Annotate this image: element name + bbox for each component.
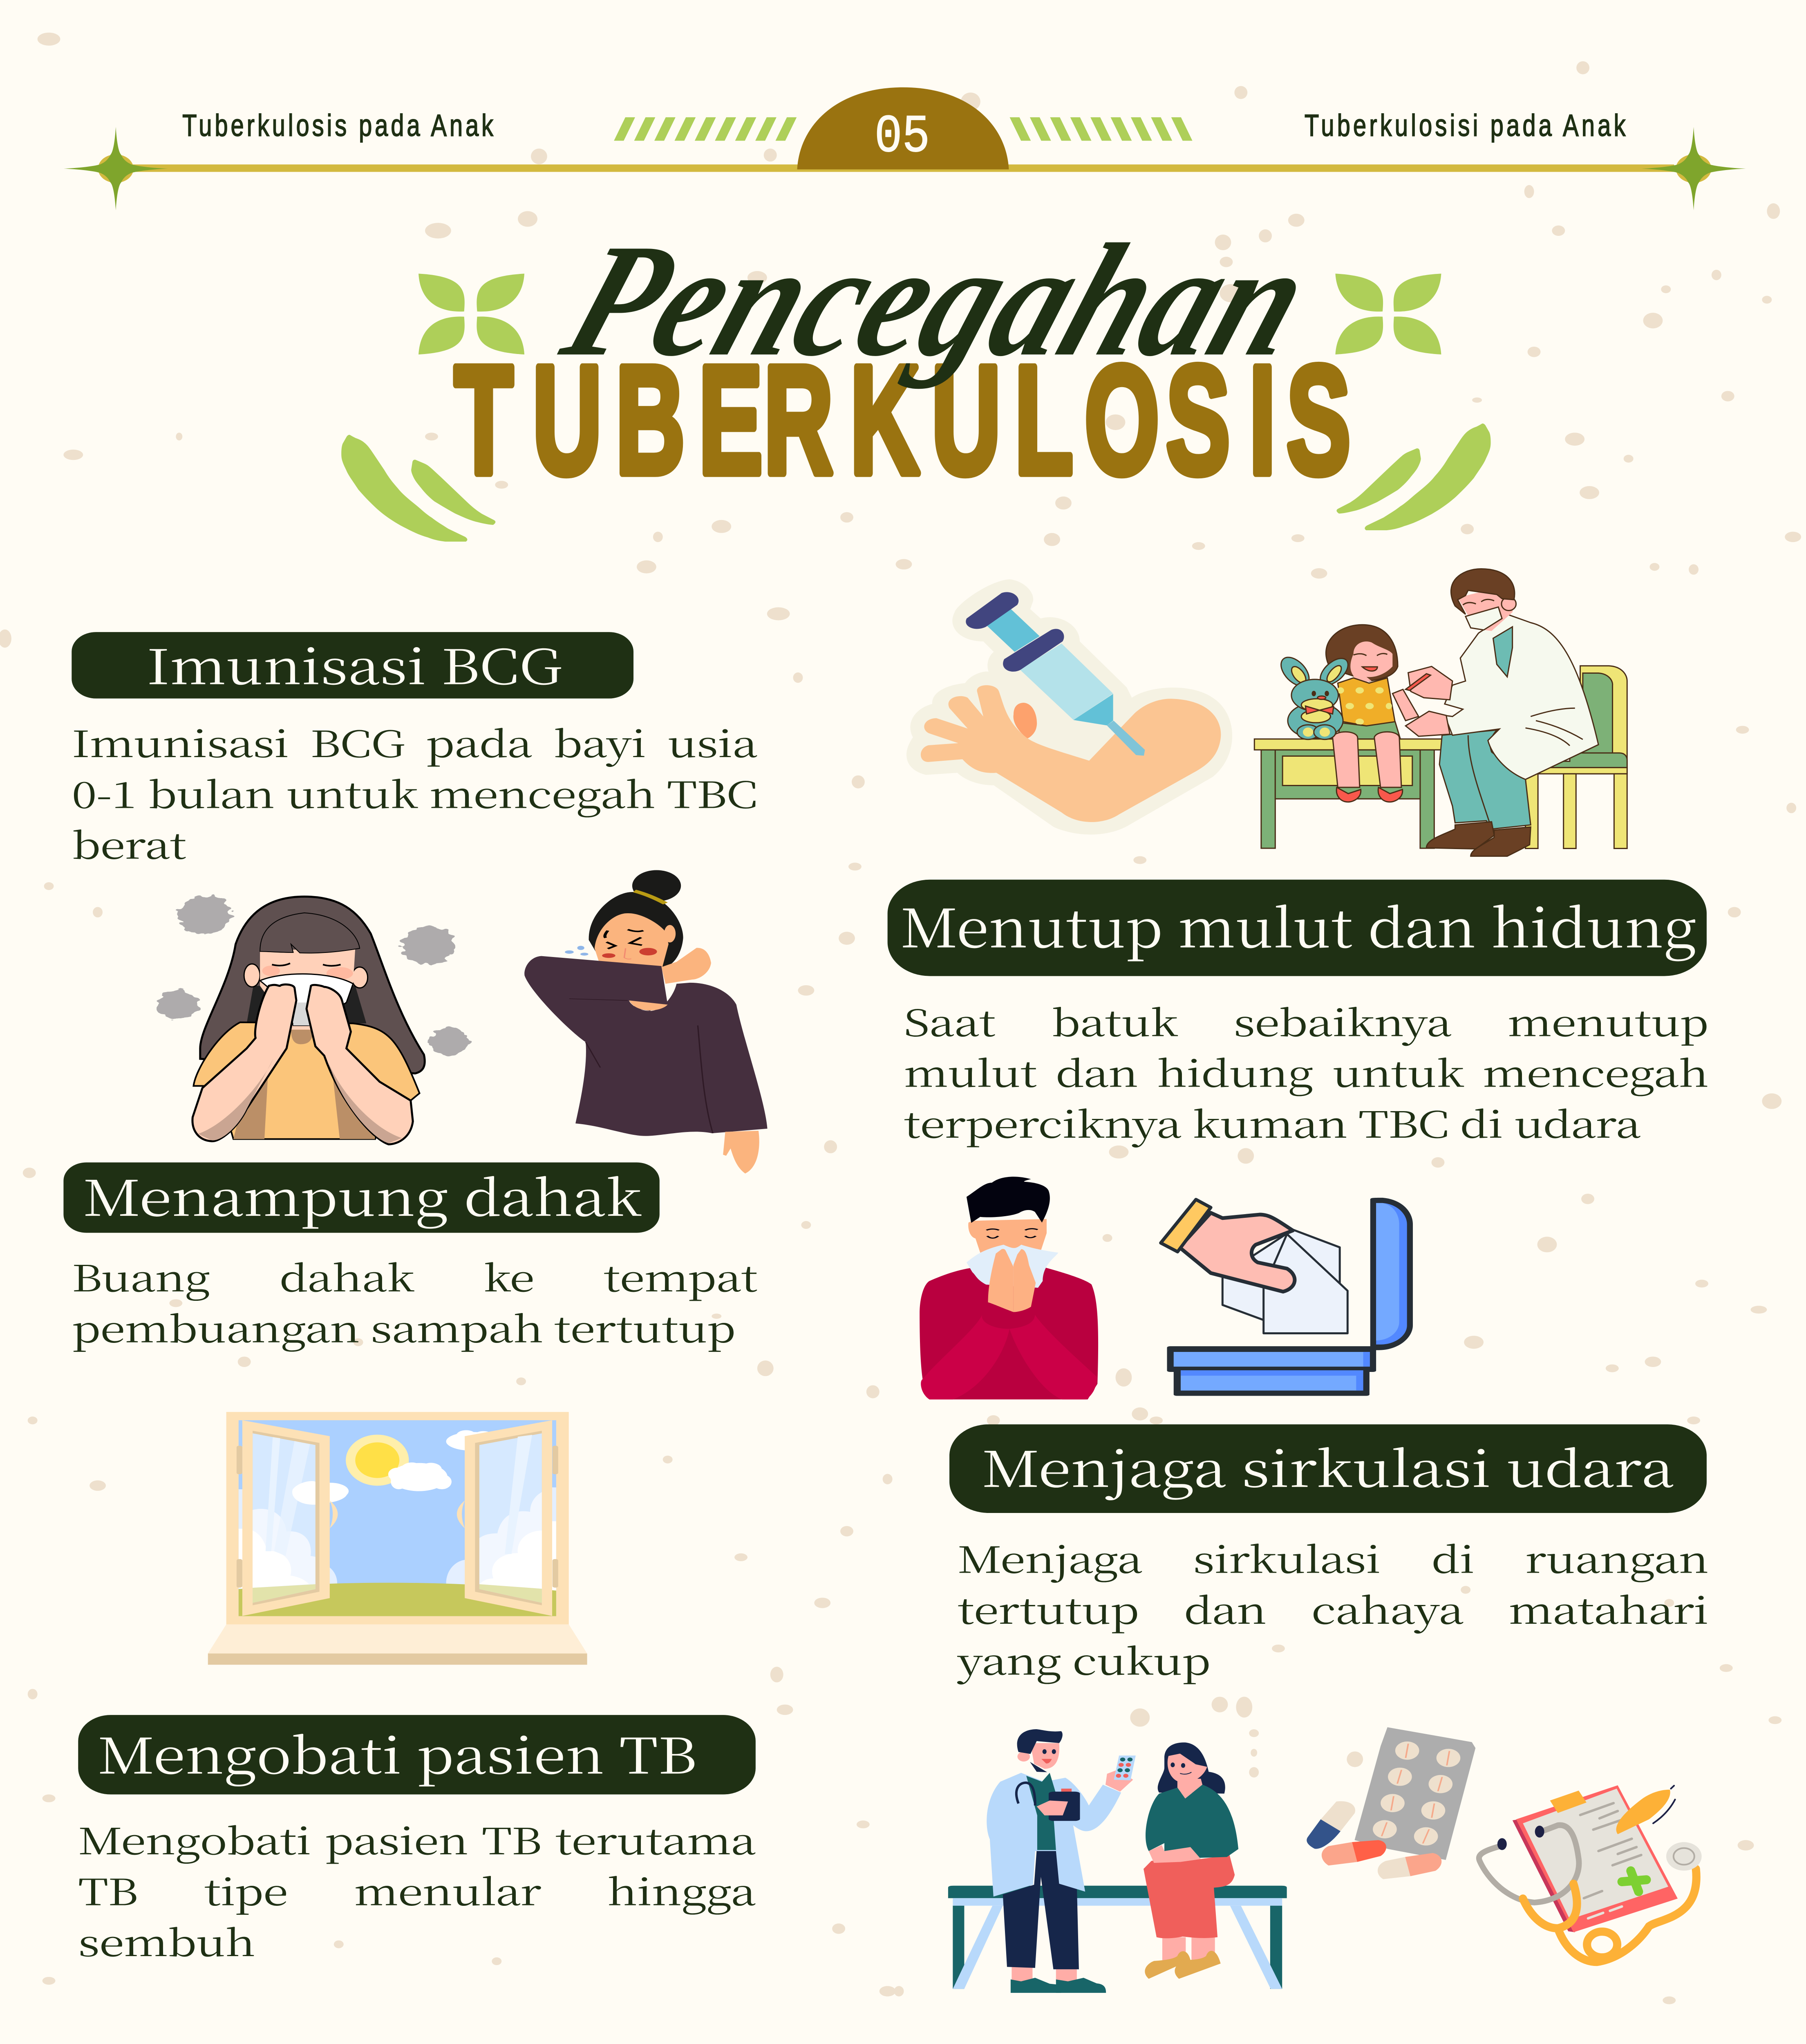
orange tubing bbox=[1523, 1869, 1696, 1962]
dome with page number: 05 bbox=[875, 107, 930, 168]
left star ornament bbox=[64, 127, 168, 211]
cuff bbox=[1161, 1199, 1211, 1252]
hand bbox=[1179, 1213, 1295, 1292]
icon: arm and syringe sticker bbox=[906, 579, 1232, 834]
text: Menjaga sirkulasi udara: Menjaga sirkulasi di ruangan bbox=[958, 1533, 1708, 1585]
pen bbox=[1616, 1790, 1670, 1834]
title: Tuberkulosis: TUBERKULOSIS bbox=[454, 334, 1351, 506]
frame bbox=[226, 1412, 569, 1625]
left stripes bbox=[614, 117, 797, 141]
text: Menampung dahak: Buang dahak ke tempat bbox=[72, 1251, 757, 1303]
text: Mengobati pasien TB: Mengobati pasien TB terutama bbox=[78, 1814, 756, 1866]
hair bbox=[200, 896, 425, 1074]
header right text: Tuberkulosisi pada Anak bbox=[1305, 108, 1626, 143]
arms and hands bbox=[192, 984, 413, 1144]
text: Menutup mulut dan hidung: terperciknya kuman TBC di udara bbox=[904, 1097, 1640, 1150]
icon: open window bbox=[208, 1412, 587, 1665]
right curved leaves bbox=[1336, 424, 1491, 530]
tablets bbox=[1373, 1741, 1460, 1845]
face bbox=[244, 913, 368, 1030]
text: Menutup mulut dan hidung: mulut dan hidung untuk mencegah bbox=[904, 1047, 1708, 1098]
dome with page number bbox=[797, 87, 1009, 169]
arm and hand bbox=[921, 685, 1221, 822]
text: Menampung dahak bbox=[72, 1252, 757, 1354]
text: Mengobati pasien TB: TB tipe menular hingga bbox=[78, 1865, 756, 1917]
icon: man sneezing into tissue bbox=[920, 1177, 1098, 1399]
icon: medicine pills bbox=[1307, 1727, 1475, 1879]
pill heading: Imunisasi BCG: Imunisasi BCG bbox=[147, 629, 562, 698]
sun bbox=[346, 1434, 409, 1486]
ear tips bbox=[1497, 1838, 1507, 1850]
tissue bbox=[260, 974, 353, 1025]
hinges bbox=[237, 1446, 558, 1588]
text: Menampung dahak: pembuangan sampah tertutup bbox=[72, 1302, 735, 1354]
text: Menutup mulut dan hidung bbox=[904, 997, 1708, 1150]
doctor bbox=[1405, 569, 1598, 856]
icon: girl covering mouth with tissue bbox=[158, 896, 468, 1144]
blister pack bbox=[1354, 1727, 1475, 1860]
bench bbox=[948, 1886, 1287, 1989]
icon: woman coughing into elbow bbox=[524, 870, 768, 1174]
text: Menjaga sirkulasi udara bbox=[958, 1534, 1708, 1686]
icon: hand dropping tissue in bin bbox=[1161, 1198, 1413, 1396]
bin base bbox=[1167, 1346, 1376, 1372]
patient figure bbox=[1144, 1742, 1238, 1979]
clipboard bbox=[1513, 1819, 1575, 1932]
text: Mengobati pasien TB bbox=[78, 1815, 756, 1968]
pill heading: Mengobati pasien TB: Mengobati pasien TB bbox=[98, 1717, 697, 1788]
syringe bbox=[966, 592, 1145, 756]
icon: doctor talking to patient on bench bbox=[948, 1729, 1287, 1993]
gold rule bbox=[127, 164, 1674, 172]
gray tubing bbox=[1479, 1825, 1579, 1903]
text: Menjaga sirkulasi udara: yang cukup bbox=[958, 1634, 1211, 1686]
text: Imunisasi BCG bbox=[72, 718, 757, 870]
text: Menjaga sirkulasi udara: tertutup dan cahaya matahari bbox=[958, 1583, 1708, 1636]
toy rabbit bbox=[1276, 657, 1354, 740]
header ornament line bbox=[64, 87, 1746, 211]
title: Pencegahan: Pencegahan bbox=[542, 211, 1332, 390]
window sill bbox=[208, 1625, 587, 1665]
text: Imunisasi BCG: 0-1 bulan untuk mencegah TBC bbox=[72, 768, 757, 820]
thumb bbox=[1014, 703, 1037, 738]
right stripes bbox=[1009, 117, 1193, 141]
right cross leaves bbox=[1335, 273, 1441, 354]
text: Mengobati pasien TB: sembuh bbox=[78, 1916, 255, 1968]
pill heading: Menutup mulut dan hidung: Menutup mulut dan hidung bbox=[901, 886, 1697, 963]
tissue bbox=[1222, 1230, 1340, 1320]
text: Imunisasi BCG: berat bbox=[72, 818, 186, 870]
sky and grass bbox=[239, 1420, 556, 1616]
pill heading: Menampung dahak: Menampung dahak bbox=[83, 1159, 642, 1230]
text: Menutup mulut dan hidung: Saat batuk sebaiknya menutup bbox=[904, 995, 1708, 1048]
capsules bbox=[1307, 1801, 1441, 1879]
clouds bbox=[290, 1430, 501, 1503]
chair bbox=[1526, 666, 1627, 848]
germ clouds bbox=[158, 896, 468, 1056]
table bbox=[1254, 739, 1442, 848]
text: Imunisasi BCG: Imunisasi BCG pada bayi usia bbox=[72, 717, 757, 769]
left casement bbox=[242, 1420, 330, 1616]
sticker halo bbox=[906, 579, 1232, 834]
header left text: Tuberkulosis pada Anak bbox=[182, 108, 494, 143]
icon: clipboard and stethoscope bbox=[1479, 1785, 1702, 1962]
icon: doctor vaccinating child bbox=[1254, 569, 1627, 856]
right star ornament bbox=[1642, 127, 1746, 211]
doctor figure bbox=[987, 1729, 1136, 1993]
child bbox=[1326, 625, 1419, 802]
left cross leaves bbox=[418, 273, 524, 354]
chest piece bbox=[1666, 1842, 1702, 1871]
shirt bbox=[194, 1022, 419, 1139]
right casement bbox=[465, 1420, 552, 1616]
bin lid bbox=[1370, 1198, 1413, 1350]
pill heading: Menjaga sirkulasi udara: Menjaga sirkulasi udara bbox=[982, 1430, 1674, 1502]
left curved leaves bbox=[341, 435, 495, 542]
